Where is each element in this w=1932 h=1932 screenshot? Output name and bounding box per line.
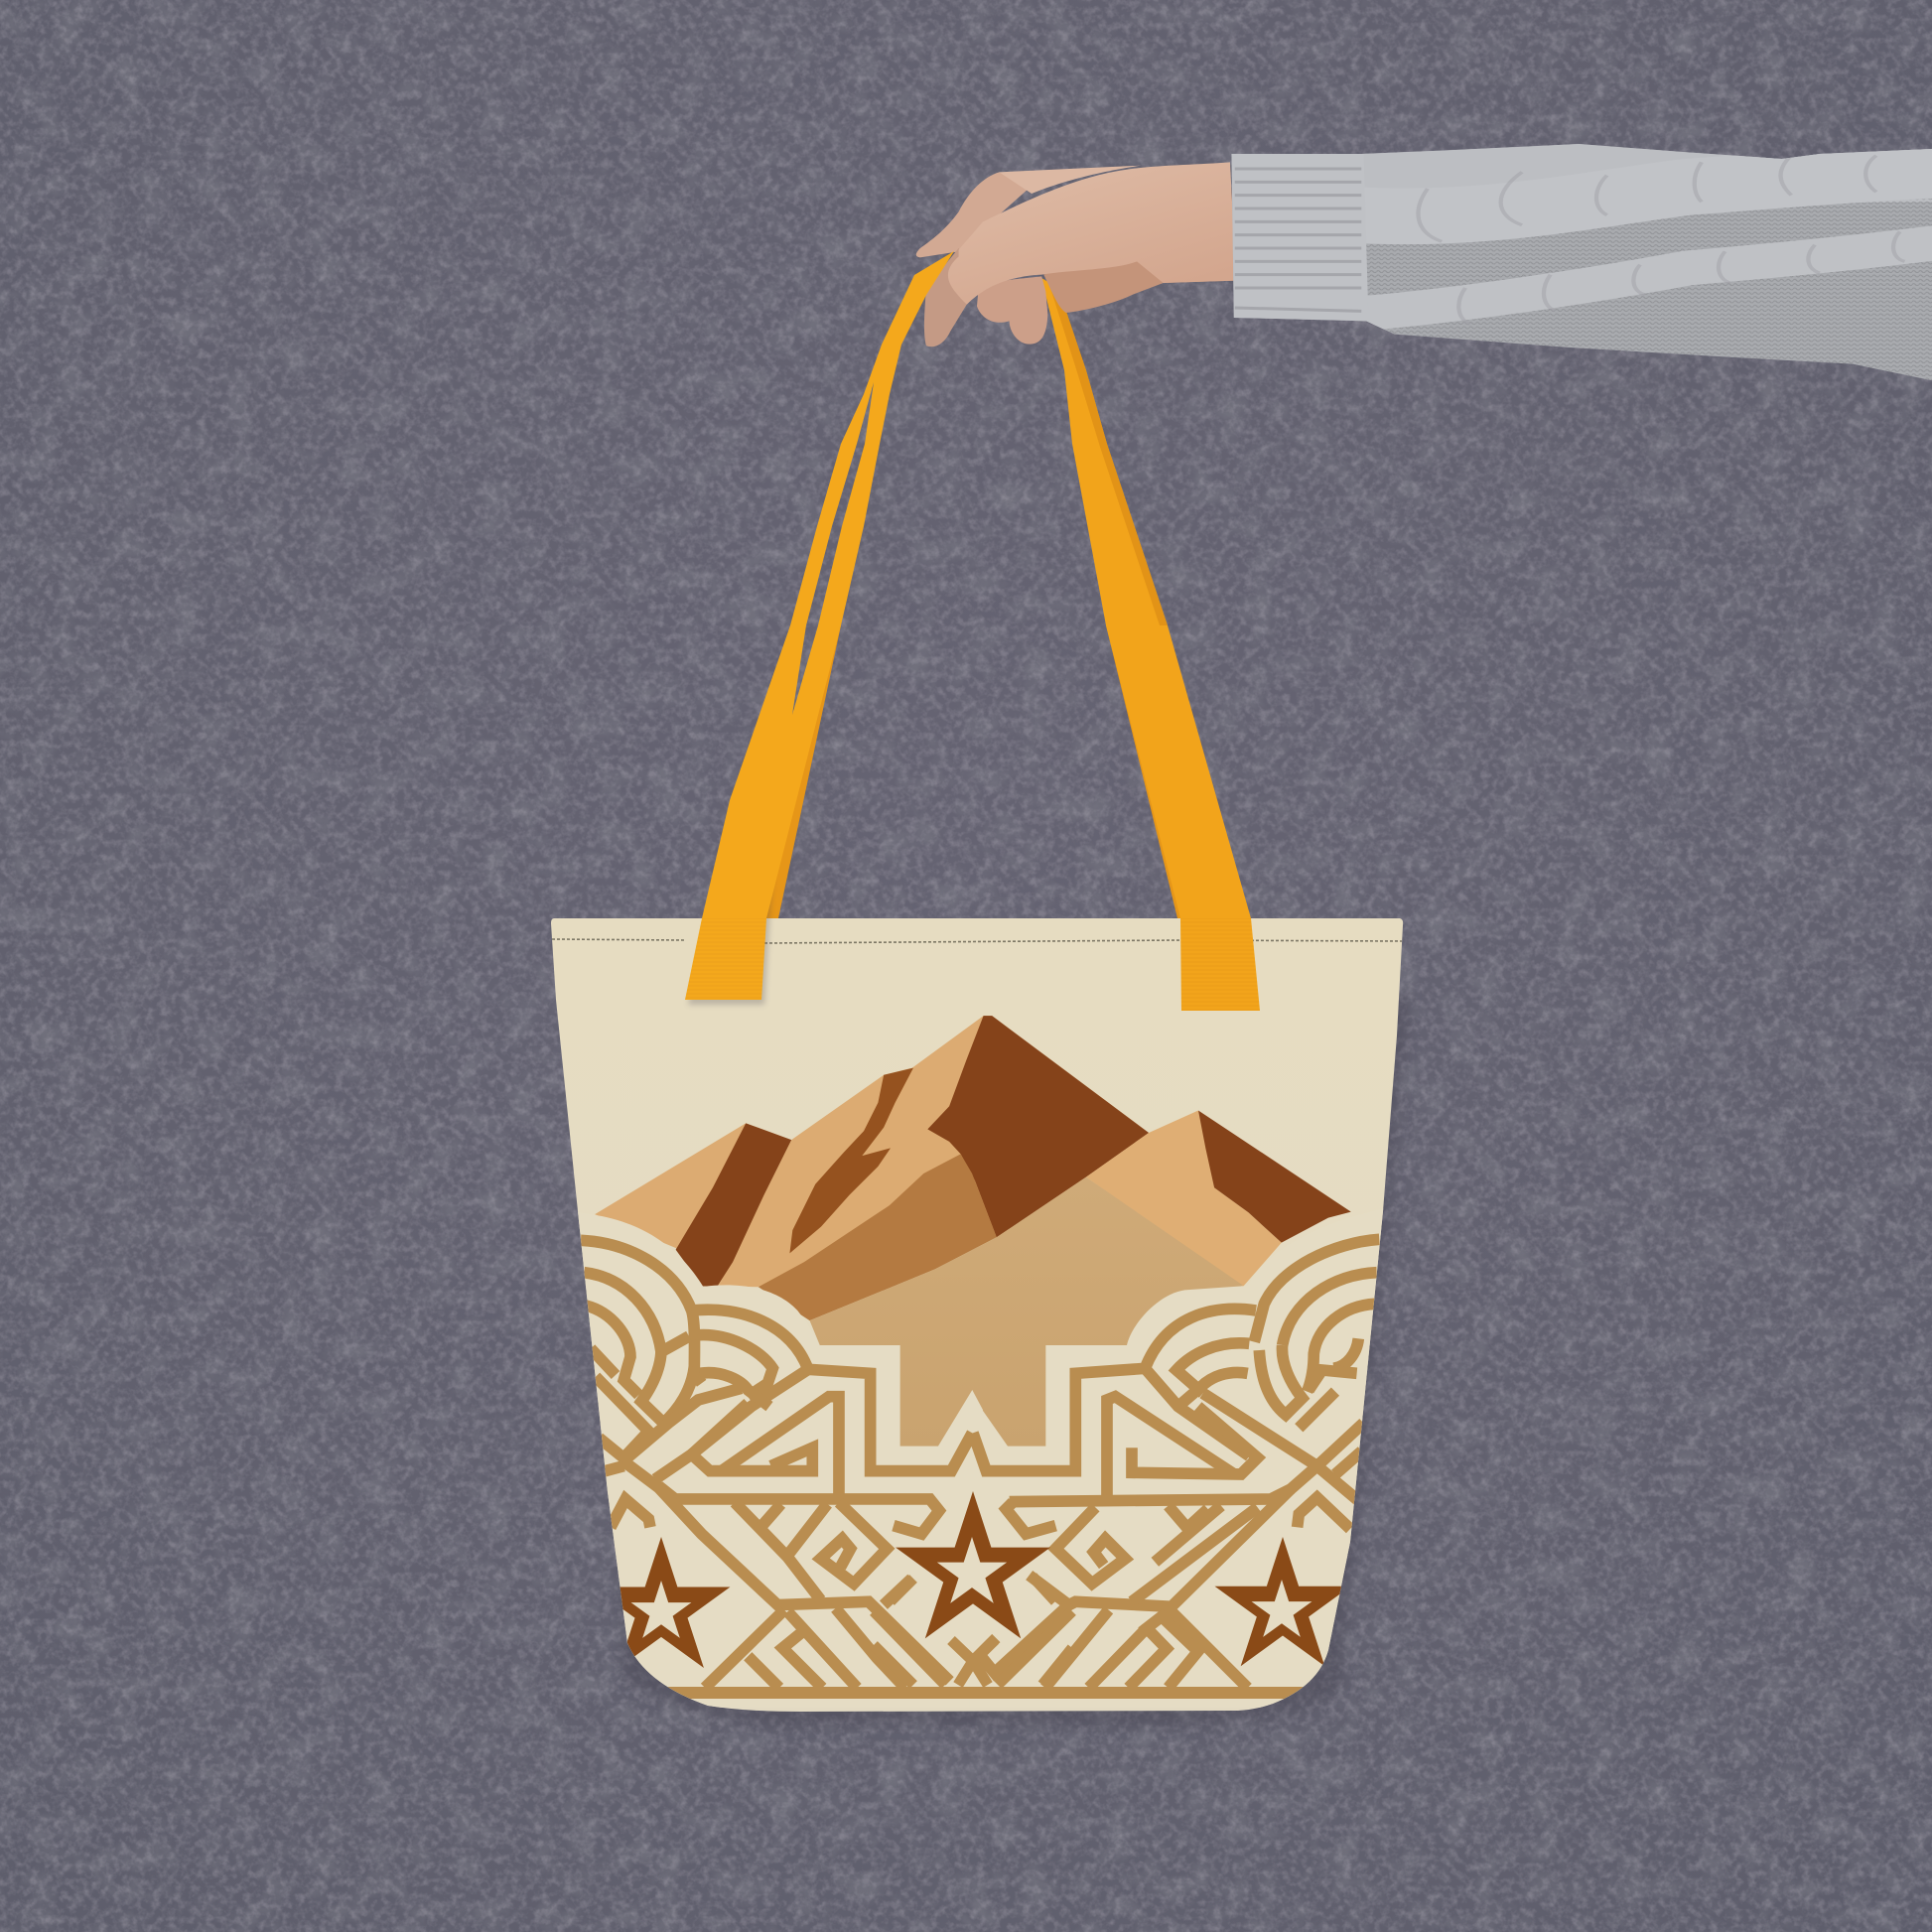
main peak mid-tone slope (759, 1154, 997, 1320)
cuff ribs (1235, 169, 1361, 311)
cable knit lower (1352, 241, 1932, 315)
back of hand and wrist (948, 162, 1236, 305)
cuff (1231, 154, 1368, 321)
star: left (593, 1537, 730, 1668)
cream band left (578, 1212, 983, 1708)
left peak light face (595, 1123, 791, 1287)
top of hand (999, 166, 1141, 194)
cream band right (983, 1209, 1384, 1708)
right strap front with tab (1041, 278, 1260, 1011)
tote bag body (551, 918, 1403, 1712)
left strap front with tab and two strands (685, 251, 954, 1005)
mountains (595, 1016, 1351, 1447)
rear finger (916, 172, 1039, 257)
sleeve body (1191, 119, 1932, 384)
cable knit upper (1333, 169, 1932, 216)
top rim of sleeve (1361, 139, 1932, 218)
right peak light face (1086, 1110, 1282, 1287)
knit texture (1364, 199, 1932, 380)
middle peak crevice (789, 1068, 913, 1253)
back strap strands (764, 625, 1195, 918)
lattice ornament left (581, 1240, 972, 1688)
main peak shadow face (927, 1016, 1149, 1237)
palm underside (1043, 255, 1236, 313)
top hem stitching (552, 939, 1402, 943)
right peak shadow face (1198, 1110, 1351, 1243)
center lattice knot (874, 1577, 1072, 1685)
bottom band (663, 1687, 1309, 1699)
star: center (896, 1491, 1050, 1638)
lattice ornament right (973, 1239, 1379, 1688)
curled fingers (977, 276, 1047, 345)
left peak shadow face (676, 1123, 791, 1287)
thumb (924, 248, 987, 346)
middle peak light face (719, 1016, 1149, 1287)
cable twists (1419, 156, 1904, 325)
printed artwork (529, 1016, 1420, 1708)
sweater sleeve (1191, 119, 1932, 384)
foreground sand slope (810, 1177, 1243, 1447)
bag shadow (596, 993, 1410, 1725)
hand (916, 162, 1236, 346)
star: right (1215, 1537, 1350, 1666)
